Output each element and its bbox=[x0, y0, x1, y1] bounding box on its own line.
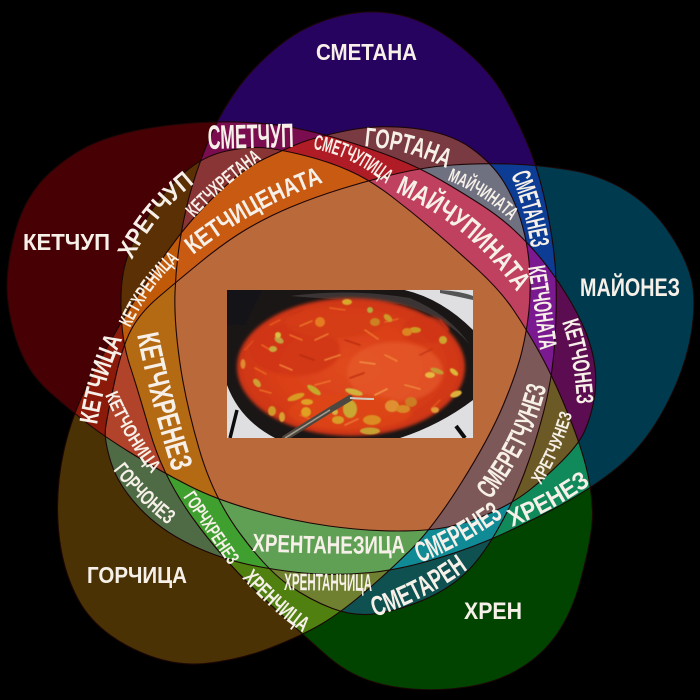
label: ГОРТАНА: ГОРТАНА bbox=[365, 128, 450, 168]
label: КЕТЧХРЕТАНА: КЕТЧХРЕТАНА bbox=[184, 150, 262, 218]
region: ketchup + smetana bbox=[202, 122, 324, 160]
label: КЕТЧОНАТА: КЕТЧОНАТА bbox=[528, 265, 557, 350]
label: ХРЕНЧИЦА: ХРЕНЧИЦА bbox=[242, 568, 308, 632]
label: КЕТЧОНИЦА: КЕТЧОНИЦА bbox=[105, 390, 160, 474]
vegetable chunks bbox=[240, 299, 463, 434]
label: КЕТЧИЦА: КЕТЧИЦА bbox=[80, 336, 122, 424]
region: four sets without smetana bbox=[125, 284, 218, 498]
region: horseradish + mustard bbox=[226, 559, 340, 634]
region: horseradish bbox=[121, 147, 593, 690]
label: СМЕТАНЕЗ: СМЕТАНЕЗ bbox=[512, 170, 550, 247]
region: ketchup + mustard bbox=[76, 324, 124, 436]
region: horseradish + smetana bbox=[342, 540, 491, 614]
region: mustard + smetana bbox=[328, 127, 488, 168]
label: ХРЕНТАНЕЗИЦА: ХРЕНТАНЕЗИЦА bbox=[252, 534, 404, 558]
label: ГОРЧИЦА: ГОРЧИЦА bbox=[87, 562, 187, 588]
label: ХРЕТЧУП: ХРЕТЧУП bbox=[117, 170, 194, 260]
region: ketchup bbox=[7, 122, 596, 531]
label: СМЕТЧУП: СМЕТЧУП bbox=[208, 124, 293, 150]
region: ketchup + mayonnaise + mustard bbox=[106, 347, 165, 472]
region: ketchup + horseradish + mustard bbox=[122, 235, 180, 343]
label: КЕТЧОНЕЗ: КЕТЧОНЕЗ bbox=[562, 318, 594, 404]
region: four sets without ketchup bbox=[220, 500, 427, 574]
sauce streaks bbox=[245, 308, 448, 425]
region: four sets without mayonnaise bbox=[176, 152, 366, 281]
region: mayonnaise + smetana bbox=[490, 164, 556, 276]
region: ketchup + mayonnaise + horseradish bbox=[513, 377, 578, 501]
label: КЕТЧХРЕНЕЗ: КЕТЧХРЕНЕЗ bbox=[137, 332, 192, 470]
label: КЕТХРЕНИЦА: КЕТХРЕНИЦА bbox=[118, 252, 180, 328]
region: ketchup + mayonnaise bbox=[552, 280, 596, 440]
region: four sets without horseradish bbox=[370, 170, 530, 328]
label: СМЕТАНА: СМЕТАНА bbox=[316, 39, 417, 65]
label: ХРЕНЕЗ: ХРЕНЕЗ bbox=[506, 472, 588, 527]
region: smetana bbox=[175, 12, 556, 615]
region: ketchup + horseradish bbox=[122, 162, 200, 320]
label: СМЕТЧУПИЦА: СМЕТЧУПИЦА bbox=[314, 135, 392, 184]
region: centre, all five sets bbox=[175, 182, 526, 530]
region: mayonnaise + mustard bbox=[106, 438, 223, 557]
region: smetana + ketchup + horseradish bbox=[182, 148, 281, 231]
region: mayonnaise bbox=[105, 164, 694, 574]
label: СМЕТАРЕН: СМЕТАРЕН bbox=[371, 554, 467, 616]
label: ГОРЧХРЕНЕЗ: ГОРЧХРЕНЕЗ bbox=[184, 490, 239, 564]
region: smetana + ketchup + mustard bbox=[284, 136, 418, 180]
region: mustard bbox=[58, 127, 530, 664]
label: ХРЕТЧУНЕЗ: ХРЕТЧУНЕЗ bbox=[530, 412, 572, 485]
label: ГОРЧОНЕЗ: ГОРЧОНЕЗ bbox=[114, 462, 176, 524]
label: МАЙЧИНАТА: МАЙЧИНАТА bbox=[448, 168, 518, 220]
region: four sets without mustard bbox=[430, 332, 550, 529]
label: КЕТЧИЦЕНАТА: КЕТЧИЦЕНАТА bbox=[184, 168, 323, 254]
label: СМЕРЕНЕЗ: СМЕРЕНЕЗ bbox=[415, 502, 502, 562]
region: smetana + ketchup + mayonnaise bbox=[527, 244, 556, 374]
label: ХРЕНТАНЧИЦА: ХРЕНТАНЧИЦА bbox=[284, 574, 372, 596]
region: smetana + mayonnaise + horseradish bbox=[391, 503, 511, 570]
label: ХРЕН: ХРЕН bbox=[464, 598, 522, 625]
region: smetana + mayonnaise + mustard bbox=[422, 164, 526, 240]
region: smetana + horseradish + mustard bbox=[271, 569, 388, 610]
label: МАЙЧУПИНАТА: МАЙЧУПИНАТА bbox=[396, 176, 529, 292]
label: КЕТЧУП: КЕТЧУП bbox=[23, 229, 110, 255]
photo: pan of sauce bbox=[227, 288, 473, 438]
label: СМЕРЕТЧУНЕЗ: СМЕРЕТЧУНЕЗ bbox=[478, 384, 546, 497]
region: mayonnaise + horseradish + mustard bbox=[168, 475, 268, 568]
region: mayonnaise + horseradish bbox=[494, 443, 590, 538]
